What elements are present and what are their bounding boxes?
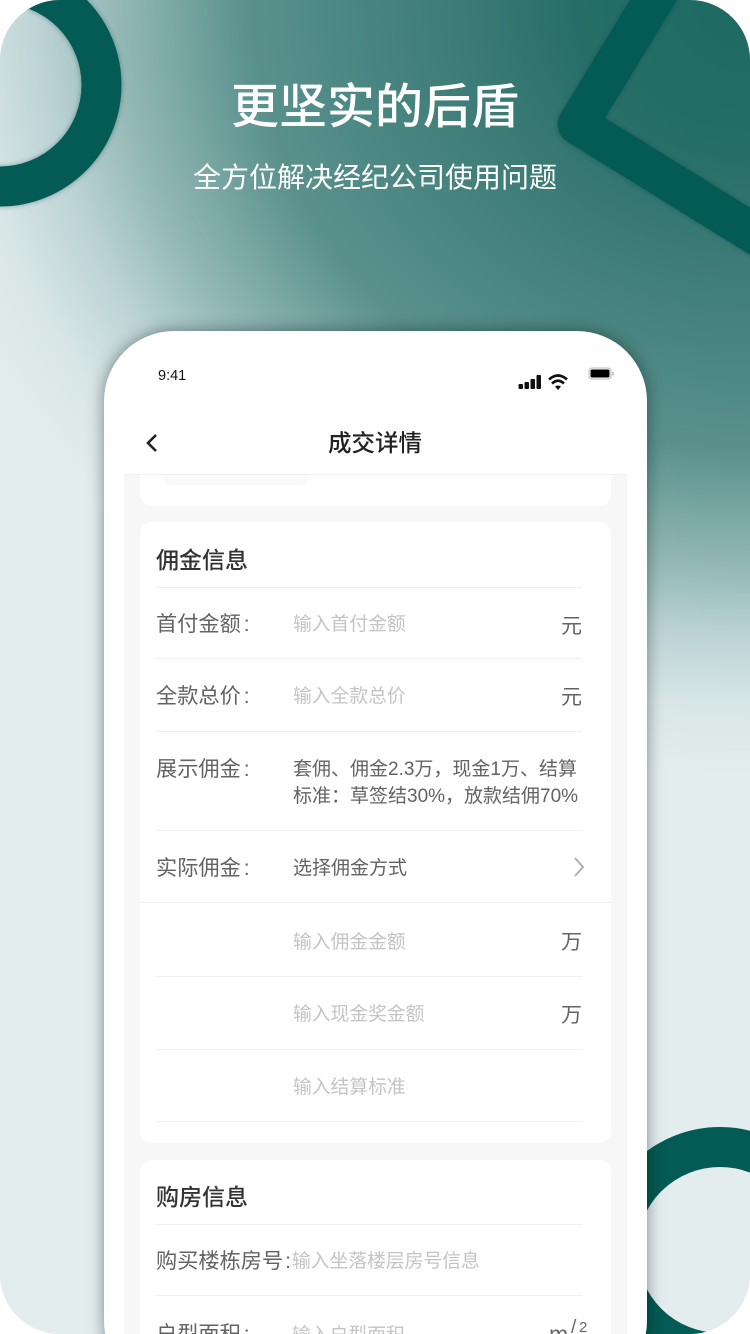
row: actual commission: 实际佣金: <box>156 857 250 880</box>
bottom-right ring <box>617 1147 750 1334</box>
card: commission info <box>140 522 611 1143</box>
content background <box>124 474 627 1334</box>
row: total price: 全款总价: <box>156 685 250 708</box>
phone screen: 万 <box>561 1004 582 1027</box>
status bar time: 9:41 <box>158 368 186 384</box>
phone screen: 套佣、佣金2.3万，现金1万、结算 <box>293 759 577 780</box>
phone screen: 标准：草签结30%，放款结佣70% <box>293 786 578 807</box>
row: settlement standard: 输入结算标准 <box>293 1076 406 1097</box>
section heading: purchase: 购房信息 <box>156 1184 248 1210</box>
phone screen: 输入首付金额 <box>293 613 406 634</box>
phone screen: 元 <box>561 615 582 638</box>
row: building and room: 购买楼栋房号: <box>156 1250 291 1273</box>
phone screen: 元 <box>561 686 582 709</box>
top-right chevron <box>578 0 750 256</box>
row: cash bonus: 输入现金奖金额 <box>293 1003 424 1024</box>
phone screen: 输入坐落楼层房号信息 <box>292 1250 480 1271</box>
phone mockup <box>104 331 647 1334</box>
phone screen: 万 <box>561 931 582 954</box>
row: displayed commission: 展示佣金: <box>156 758 250 781</box>
row: commission amount: 输入佣金金额 <box>293 931 406 952</box>
chevron right <box>574 858 584 876</box>
row: down payment: 首付金额: <box>156 613 250 636</box>
card: top partial <box>140 475 611 506</box>
top-left ring <box>0 0 102 186</box>
section heading: commission: 佣金信息 <box>156 547 248 573</box>
card: purchase info <box>140 1160 611 1334</box>
title: 更坚实的后盾 <box>231 81 519 134</box>
header title: 成交详情 <box>328 430 422 456</box>
phone screen: 输入全款总价 <box>293 685 406 706</box>
status bar icons <box>518 368 614 390</box>
phone screen: 选择佣金方式 <box>293 858 407 879</box>
back arrow <box>146 434 157 452</box>
subtitle: 全方位解决经纪公司使用问题 <box>193 162 557 193</box>
